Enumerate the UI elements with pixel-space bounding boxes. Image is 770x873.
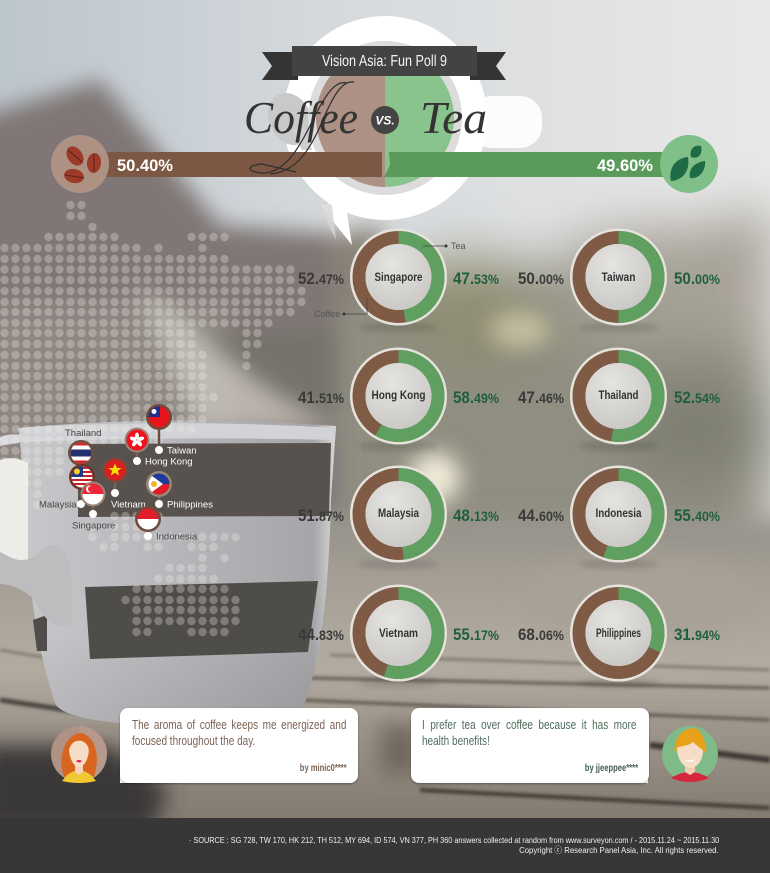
map pin: Singapore <box>72 482 115 532</box>
comparison bar: tea <box>384 135 718 193</box>
donut: Philippines <box>570 584 667 688</box>
bubble tails <box>120 772 648 783</box>
vs badge <box>371 106 399 134</box>
donut legend callouts: Tea <box>451 241 466 251</box>
map pin: Taiwan <box>146 404 197 456</box>
mug <box>0 420 336 726</box>
map pin: Malaysia <box>39 464 95 510</box>
tea percentages: 50.00% <box>674 269 720 288</box>
map pin: Vietnam <box>102 458 146 510</box>
map pin: Singapore: Singapore <box>72 520 115 532</box>
donut: Vietnam: Vietnam <box>379 628 418 640</box>
header graphic and poll charts <box>40 16 720 783</box>
tea percentages: 31.94% <box>674 625 720 644</box>
donut: Vietnam <box>350 584 447 688</box>
title: coffee: Coffee <box>244 92 358 143</box>
tea percentages: 47.53% <box>453 269 499 288</box>
donut: Thailand: Thailand <box>598 390 638 402</box>
footer source <box>0 818 770 873</box>
coffee percentages: 68.06% <box>518 625 564 644</box>
vs badge: VS. <box>375 114 395 128</box>
donut: Hong Kong <box>350 348 447 451</box>
title: tea: Tea <box>420 92 487 143</box>
donut: Malaysia: Malaysia <box>378 508 420 520</box>
footer source: · SOURCE : SG 728, TW 170, HK 212, TH 512, MY 694, ID 574, VN 377, PH 360 answers collected at random from www.surveyon.com / - 2015.11.24 ~ 2015.11.30 <box>189 835 719 845</box>
map pin: Philippines: Philippines <box>167 500 213 510</box>
map pin: Taiwan: Taiwan <box>167 446 197 456</box>
wood planks <box>0 650 770 808</box>
donut: Singapore: Singapore <box>374 272 422 284</box>
dotted Asia map <box>4 205 303 632</box>
coffee percentages: 44.83% <box>298 625 344 644</box>
tea percentages: 58.49% <box>453 388 499 407</box>
comparison bar: coffee <box>51 135 382 193</box>
tea percentages: 48.13% <box>453 506 499 525</box>
quote bubble: tea: I prefer tea over coffee because it has more <box>422 718 636 732</box>
title: coffee <box>244 82 358 174</box>
avatar: woman with coffee <box>51 726 107 783</box>
donut legend callouts: Coffee <box>314 309 340 319</box>
tea percentages: 52.54% <box>674 388 720 407</box>
map pin: Malaysia: Malaysia <box>39 500 77 510</box>
map pin: Vietnam: Vietnam <box>111 500 146 510</box>
donut: Singapore <box>350 228 447 332</box>
tea percentages <box>453 269 720 644</box>
donut: Taiwan <box>570 228 667 332</box>
map pin: Indonesia: Indonesia <box>156 532 198 542</box>
coffee percentages: 44.60% <box>518 506 564 525</box>
map pin: Thailand: Thailand <box>65 428 101 439</box>
coffee percentages: 47.46% <box>518 388 564 407</box>
donut: Thailand <box>570 348 667 451</box>
coffee percentages: 50.00% <box>518 269 564 288</box>
coffee percentages: 52.47% <box>298 269 344 288</box>
tea percentages: 55.17% <box>453 625 499 644</box>
donut: Indonesia <box>570 466 667 569</box>
map pin: Hong Kong <box>124 428 193 468</box>
map pin: Hong Kong: Hong Kong <box>145 456 193 468</box>
quote bubble: coffee: by minic0**** <box>300 763 347 774</box>
avatar: man with tea <box>662 726 718 782</box>
quote bubble: tea: by jjeeppee**** <box>585 763 638 774</box>
quote bubble: coffee: focused throughout the day. <box>132 734 255 748</box>
footer source: Copyright ⓒ Research Panel Asia, Inc. All rights reserved. <box>520 845 719 855</box>
coffee percentages: 51.87% <box>298 506 344 525</box>
coffee percentages: 41.51% <box>298 388 344 407</box>
tea percentages: 55.40% <box>674 506 720 525</box>
ribbon title: Vision Asia: Fun Poll 9 <box>322 53 447 70</box>
donut: Philippines: Philippines <box>596 628 641 640</box>
donut: Indonesia: Indonesia <box>596 508 642 520</box>
coffee percentages <box>298 269 564 644</box>
quote bubble: coffee <box>120 708 358 783</box>
donut: Hong Kong: Hong Kong <box>372 390 426 402</box>
quote bubble: tea <box>411 708 649 783</box>
donut: Taiwan: Taiwan <box>602 272 636 284</box>
comparison bar: tea: 49.60% <box>597 156 653 175</box>
map pin: Philippines <box>146 471 213 510</box>
map pin: Indonesia <box>135 506 198 542</box>
ribbon title <box>262 46 506 80</box>
cup illustration behind title <box>260 16 542 245</box>
quote bubble: coffee: The aroma of coffee keeps me energized and <box>132 718 346 732</box>
quote bubble: tea: health benefits! <box>422 734 490 748</box>
donut: Malaysia <box>350 466 447 569</box>
donut legend callouts <box>314 241 466 319</box>
comparison bar: coffee: 50.40% <box>117 156 173 175</box>
map pin: Thailand <box>65 428 101 466</box>
